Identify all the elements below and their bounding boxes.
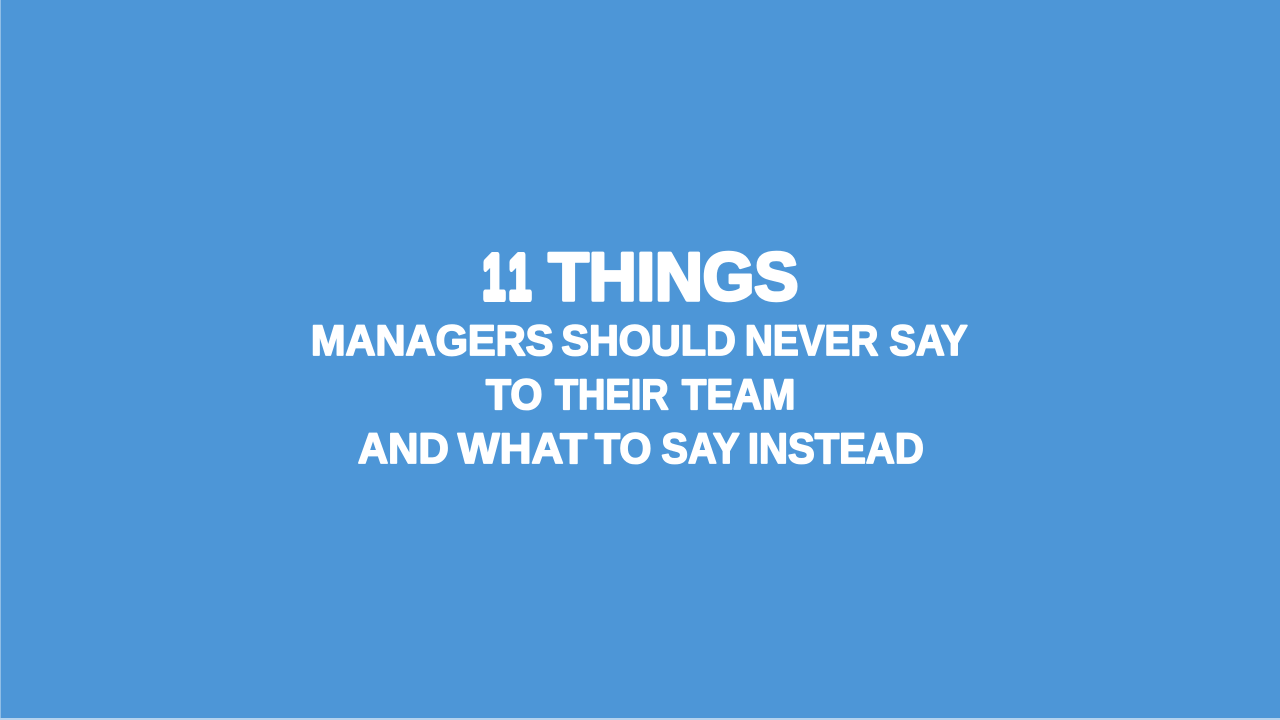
subheading line: managers should never say: [311, 317, 968, 365]
bottom edge highlight: [0, 718, 1280, 720]
subheading line: to their team: [486, 371, 795, 419]
subheading line: to their team: TEAM: [682, 371, 795, 419]
heading: 11 things: 1: [509, 241, 531, 313]
subheading line: to their team: TO: [486, 371, 542, 419]
subheading line: to their team: THEIR: [555, 371, 669, 419]
left edge highlight: [0, 0, 1, 720]
subheading line: managers should never say: SHOULD: [561, 317, 736, 365]
subheading line: and what to say instead: WHAT: [458, 425, 587, 473]
subheading line: managers should never say: SAY: [889, 317, 968, 365]
subheading line: and what to say instead: TO: [595, 425, 651, 473]
heading: 11 things: THINGS: [548, 240, 798, 315]
title block: [311, 240, 968, 473]
subheading line: managers should never say: MANAGERS: [311, 317, 553, 365]
subheading line: and what to say instead: AND: [358, 425, 449, 473]
subheading line: and what to say instead: [358, 425, 924, 473]
subheading line: managers should never say: NEVER: [745, 317, 878, 365]
subheading line: and what to say instead: SAY: [661, 425, 740, 473]
heading: 11 things: 1: [483, 241, 505, 313]
subheading line: and what to say instead: INSTEAD: [748, 425, 924, 473]
